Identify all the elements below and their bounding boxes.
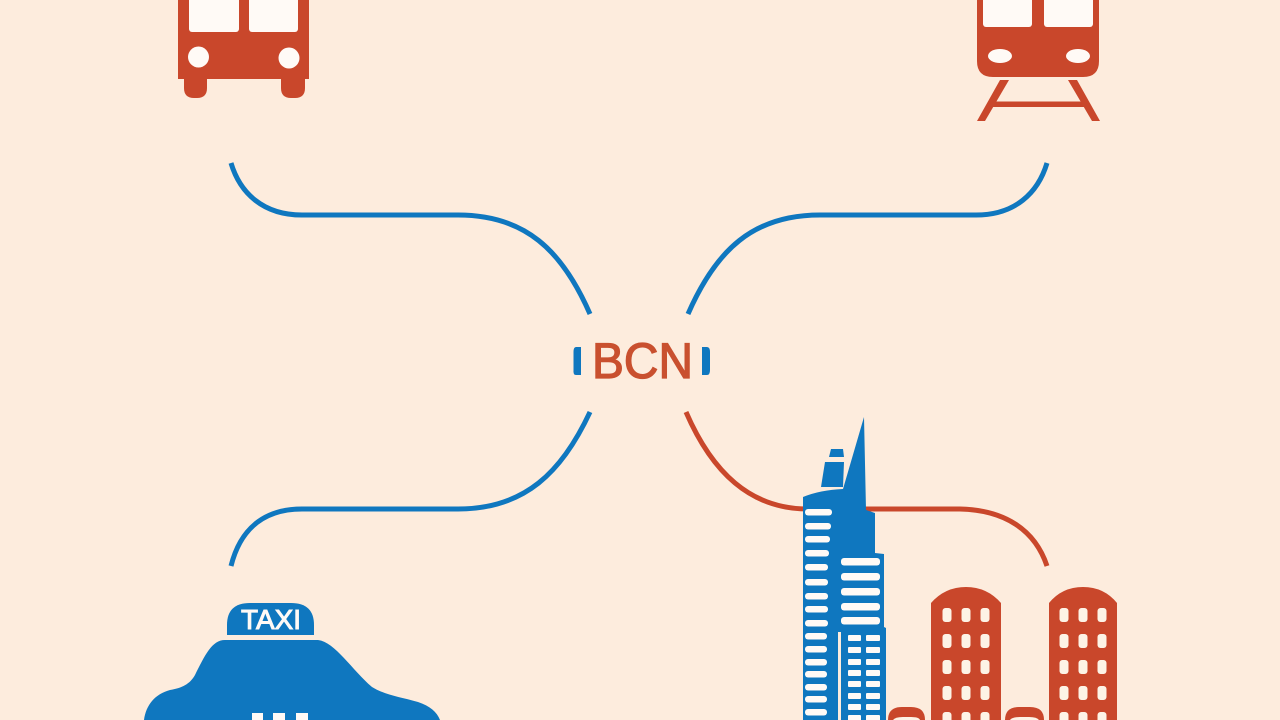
taxi windows [252, 713, 308, 720]
icon: bus [178, 0, 309, 98]
icon: taxi [144, 603, 440, 720]
central label: BCN [573, 333, 710, 389]
label text: BCN [592, 333, 693, 389]
taxi body [144, 640, 440, 720]
connector: bus to BCN [231, 163, 590, 314]
connector: train to BCN [688, 163, 1047, 314]
blue skyscraper [803, 417, 886, 720]
connector: taxi to BCN [231, 412, 590, 566]
small red arch left [888, 707, 925, 720]
red building right [1049, 587, 1117, 720]
right bracket [702, 347, 710, 375]
icon: train [977, 0, 1100, 121]
connector: city to BCN [686, 412, 1047, 566]
taxi roof sign [227, 603, 314, 635]
left bracket [573, 347, 581, 375]
taxi sign text: TAXI [241, 604, 301, 635]
small red arch right [1005, 707, 1044, 720]
red building left [931, 587, 1001, 720]
icon: city skyline [803, 417, 1117, 720]
